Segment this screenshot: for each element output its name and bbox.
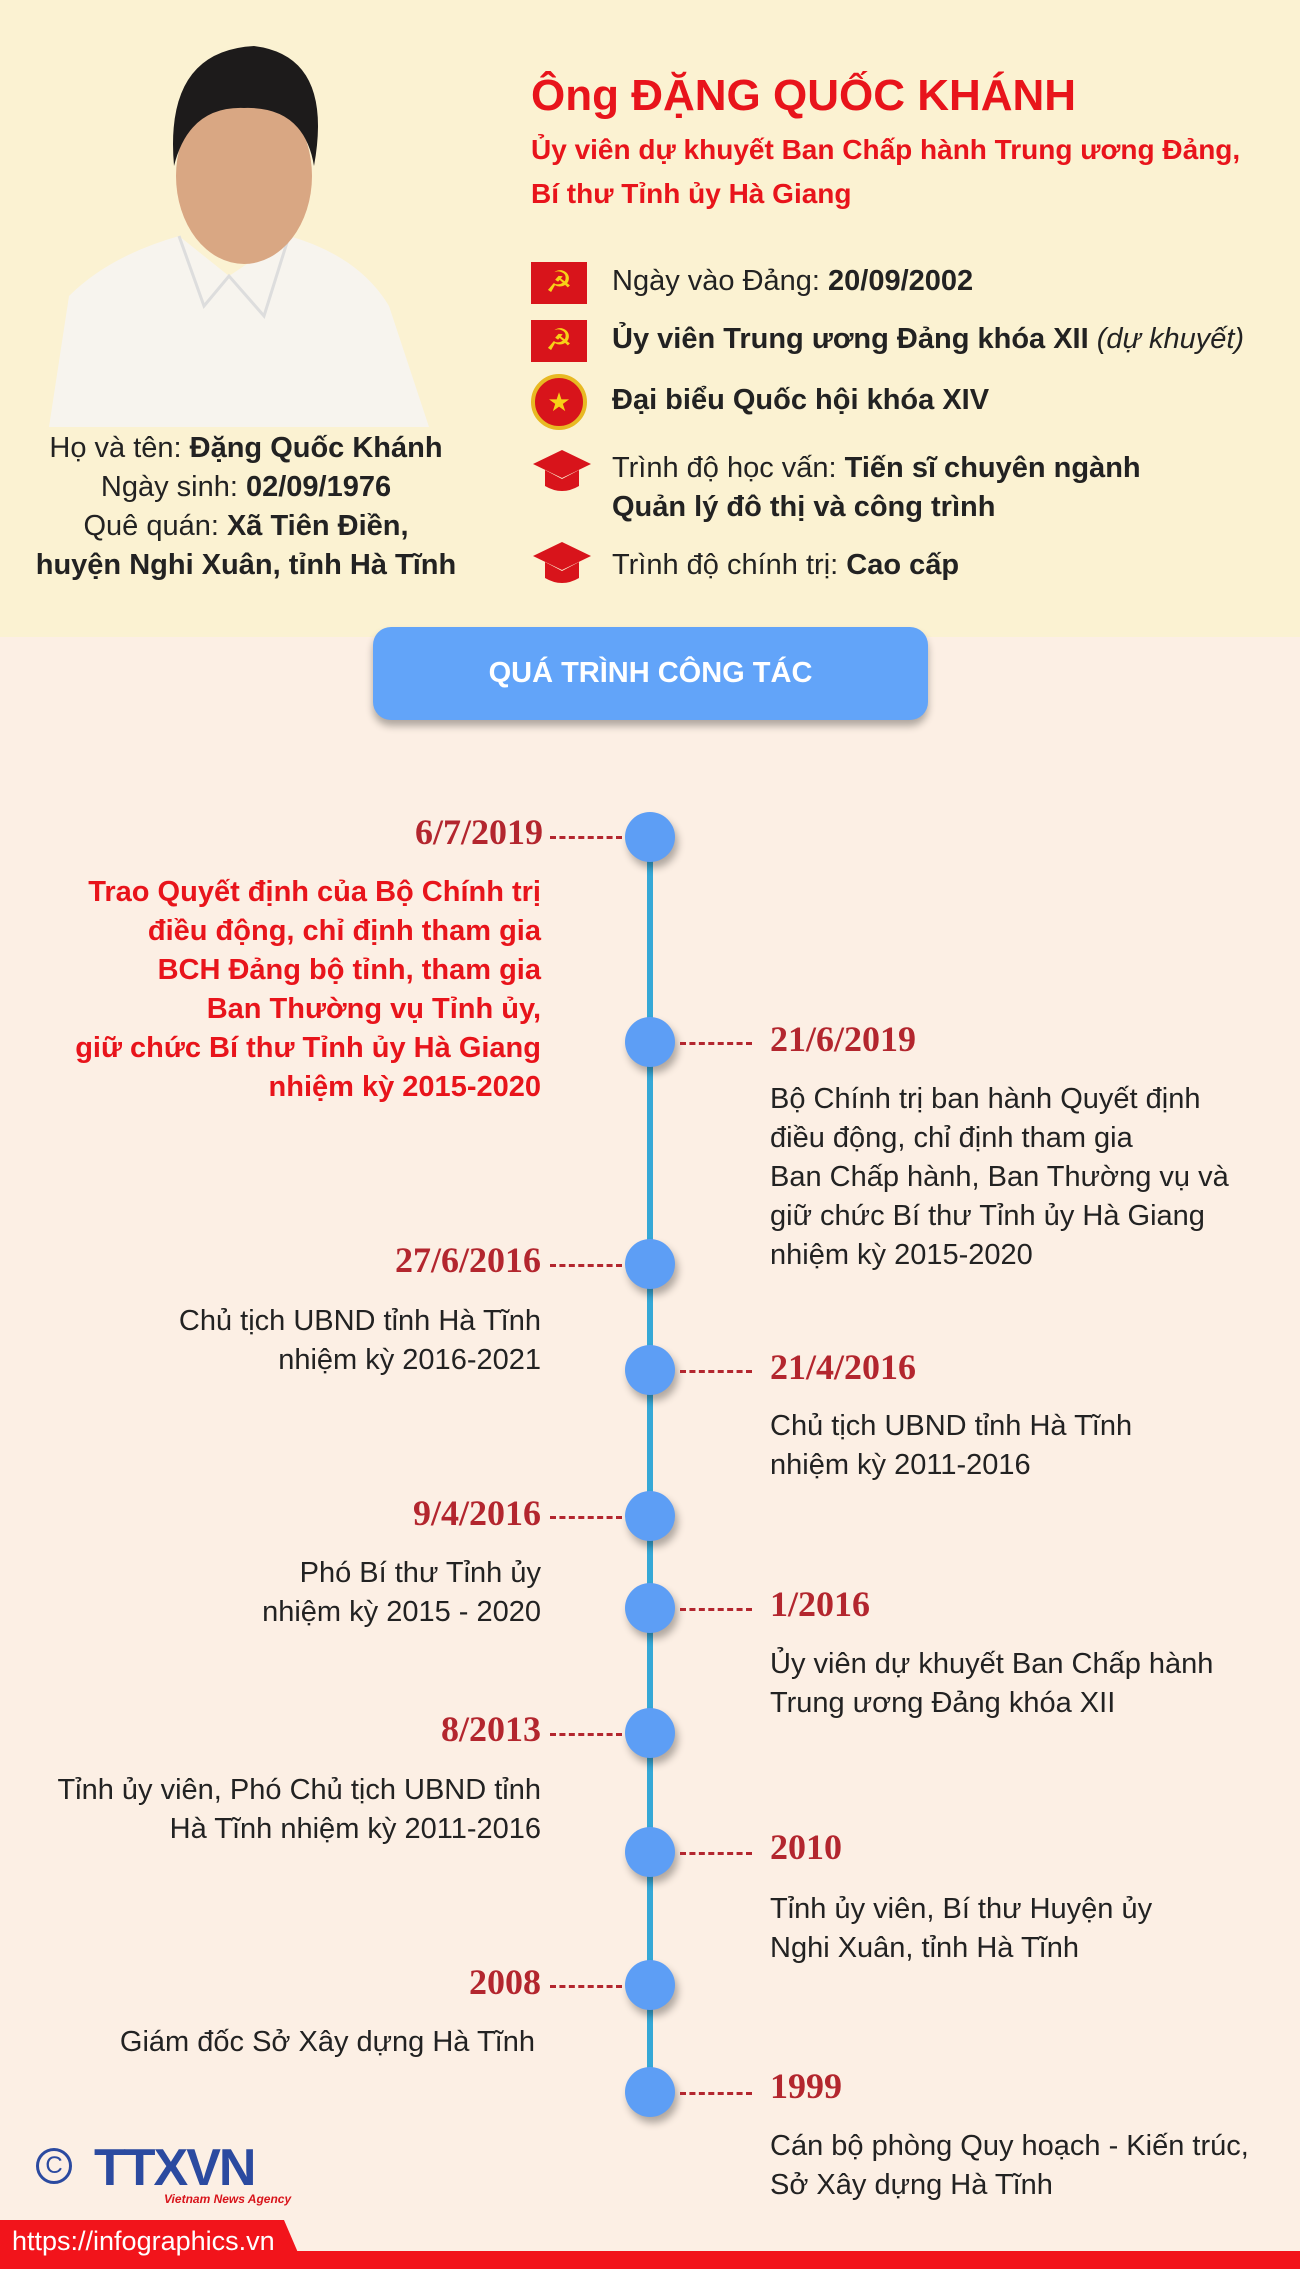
text: Chủ tịch UBND tỉnh Hà Tĩnh [179,1305,541,1337]
entry 1999: 1999 [770,2066,842,2106]
entry 1/2016: 1/2016 [770,1584,870,1624]
subtitle: Bí thư Tỉnh ủy Hà Giang [531,178,852,209]
text: điều động, chỉ định tham gia [770,1122,1133,1154]
title: Ông ĐẶNG QUỐC KHÁNH [531,71,1076,120]
row: education: Quản lý đô thị và công trình [612,491,995,523]
section button: QUÁ TRÌNH CÔNG TÁC [489,657,812,689]
text: Giám đốc Sở Xây dựng Hà Tĩnh [120,2026,535,2058]
header background [0,0,1300,637]
logo TTXVN [36,2139,292,2206]
section button [373,627,928,720]
entry 6/7/2019: 6/7/2019 [415,812,543,852]
icon: grad cap 2 [533,542,591,583]
entry 6/7/2019: nhiệm kỳ 2015-2020 [269,1071,541,1103]
text: Phó Bí thư Tỉnh ủy [300,1557,541,1589]
row: education: Trình độ học vấn: Tiến sĩ chuyên ngành [612,452,1141,484]
row: party date: Ngày vào Đảng: 20/09/2002 [612,265,973,297]
footer bar [0,2251,1300,2269]
text: nhiệm kỳ 2011-2016 [770,1449,1031,1481]
text: Hà Tĩnh nhiệm kỳ 2011-2016 [170,1813,541,1845]
text: nhiệm kỳ 2015-2020 [770,1239,1033,1271]
text: Tỉnh ủy viên, Phó Chủ tịch UBND tỉnh [57,1774,541,1806]
entry 21/4/2016: 21/4/2016 [770,1347,916,1387]
personal info [36,432,456,581]
logo TTXVN: C [45,2152,63,2179]
entry 6/7/2019: Ban Thường vụ Tỉnh ủy, [207,993,541,1025]
personal info: Họ và tên: Đặng Quốc Khánh [49,432,443,464]
personal info: Quê quán: Xã Tiên Điền, [83,510,409,542]
text: giữ chức Bí thư Tỉnh ủy Hà Giang [770,1200,1205,1232]
text: Tỉnh ủy viên, Bí thư Huyện ủy [770,1893,1152,1925]
text: Ủy viên dự khuyết Ban Chấp hành [770,1648,1213,1680]
logo TTXVN: TTXVN [94,2139,254,2197]
text: nhiệm kỳ 2015 - 2020 [262,1596,541,1628]
text: Bộ Chính trị ban hành Quyết định [770,1083,1200,1115]
icon: grad cap 1 [533,450,591,491]
row: education [612,452,1141,523]
entry 21/6/2019: 21/6/2019 [770,1019,916,1059]
text: Cán bộ phòng Quy hoạch - Kiến trúc, [770,2130,1249,2162]
entry 6/7/2019 [75,812,543,1103]
text: Trung ương Đảng khóa XII [770,1687,1115,1719]
footer url tab: https://infographics.vn [12,2226,275,2256]
dashes [550,836,622,839]
entry 6/7/2019: điều động, chỉ định tham gia [148,915,541,947]
entry 8/2013: 8/2013 [441,1709,541,1749]
icon: party flag 1 [531,262,587,304]
icon: party flag 1: ☭ [546,266,572,299]
text: Ban Chấp hành, Ban Thường vụ và [770,1161,1229,1193]
entry 2008: 2008 [469,1962,541,2002]
icon: party flag 2: ☭ [546,324,572,357]
entry 9/4/2016: 9/4/2016 [413,1493,541,1533]
personal info: huyện Nghi Xuân, tỉnh Hà Tĩnh [36,549,456,581]
entry 2010: 2010 [770,1827,842,1867]
icon: emblem: ★ [547,387,571,417]
photo [49,46,429,427]
entry 6/7/2019: giữ chức Bí thư Tỉnh ủy Hà Giang [75,1032,541,1064]
entry 6/7/2019: BCH Đảng bộ tỉnh, tham gia [158,954,541,986]
row: politics: Trình độ chính trị: Cao cấp [612,549,959,581]
subtitle: Ủy viên dự khuyết Ban Chấp hành Trung ương Đảng, [531,134,1240,165]
logo TTXVN: Vietnam News Agency [164,2192,291,2206]
text: Sở Xây dựng Hà Tĩnh [770,2169,1053,2201]
text: Chủ tịch UBND tỉnh Hà Tĩnh [770,1410,1132,1442]
subtitle [531,134,1240,209]
text: Nghi Xuân, tỉnh Hà Tĩnh [770,1932,1079,1964]
entry 6/7/2019: Trao Quyết định của Bộ Chính trị [88,876,541,908]
entry 27/6/2016: 27/6/2016 [395,1240,541,1280]
row: national assembly: Đại biểu Quốc hội khóa XIV [612,384,989,416]
row: central committee: Ủy viên Trung ương Đảng khóa XII (dự khuyết) [612,323,1244,355]
icon: party flag 2 [531,320,587,362]
icon: emblem [531,374,587,430]
personal info: Ngày sinh: 02/09/1976 [101,471,391,503]
timeline [624,812,682,2128]
text: nhiệm kỳ 2016-2021 [278,1344,541,1376]
info list [531,262,1244,583]
